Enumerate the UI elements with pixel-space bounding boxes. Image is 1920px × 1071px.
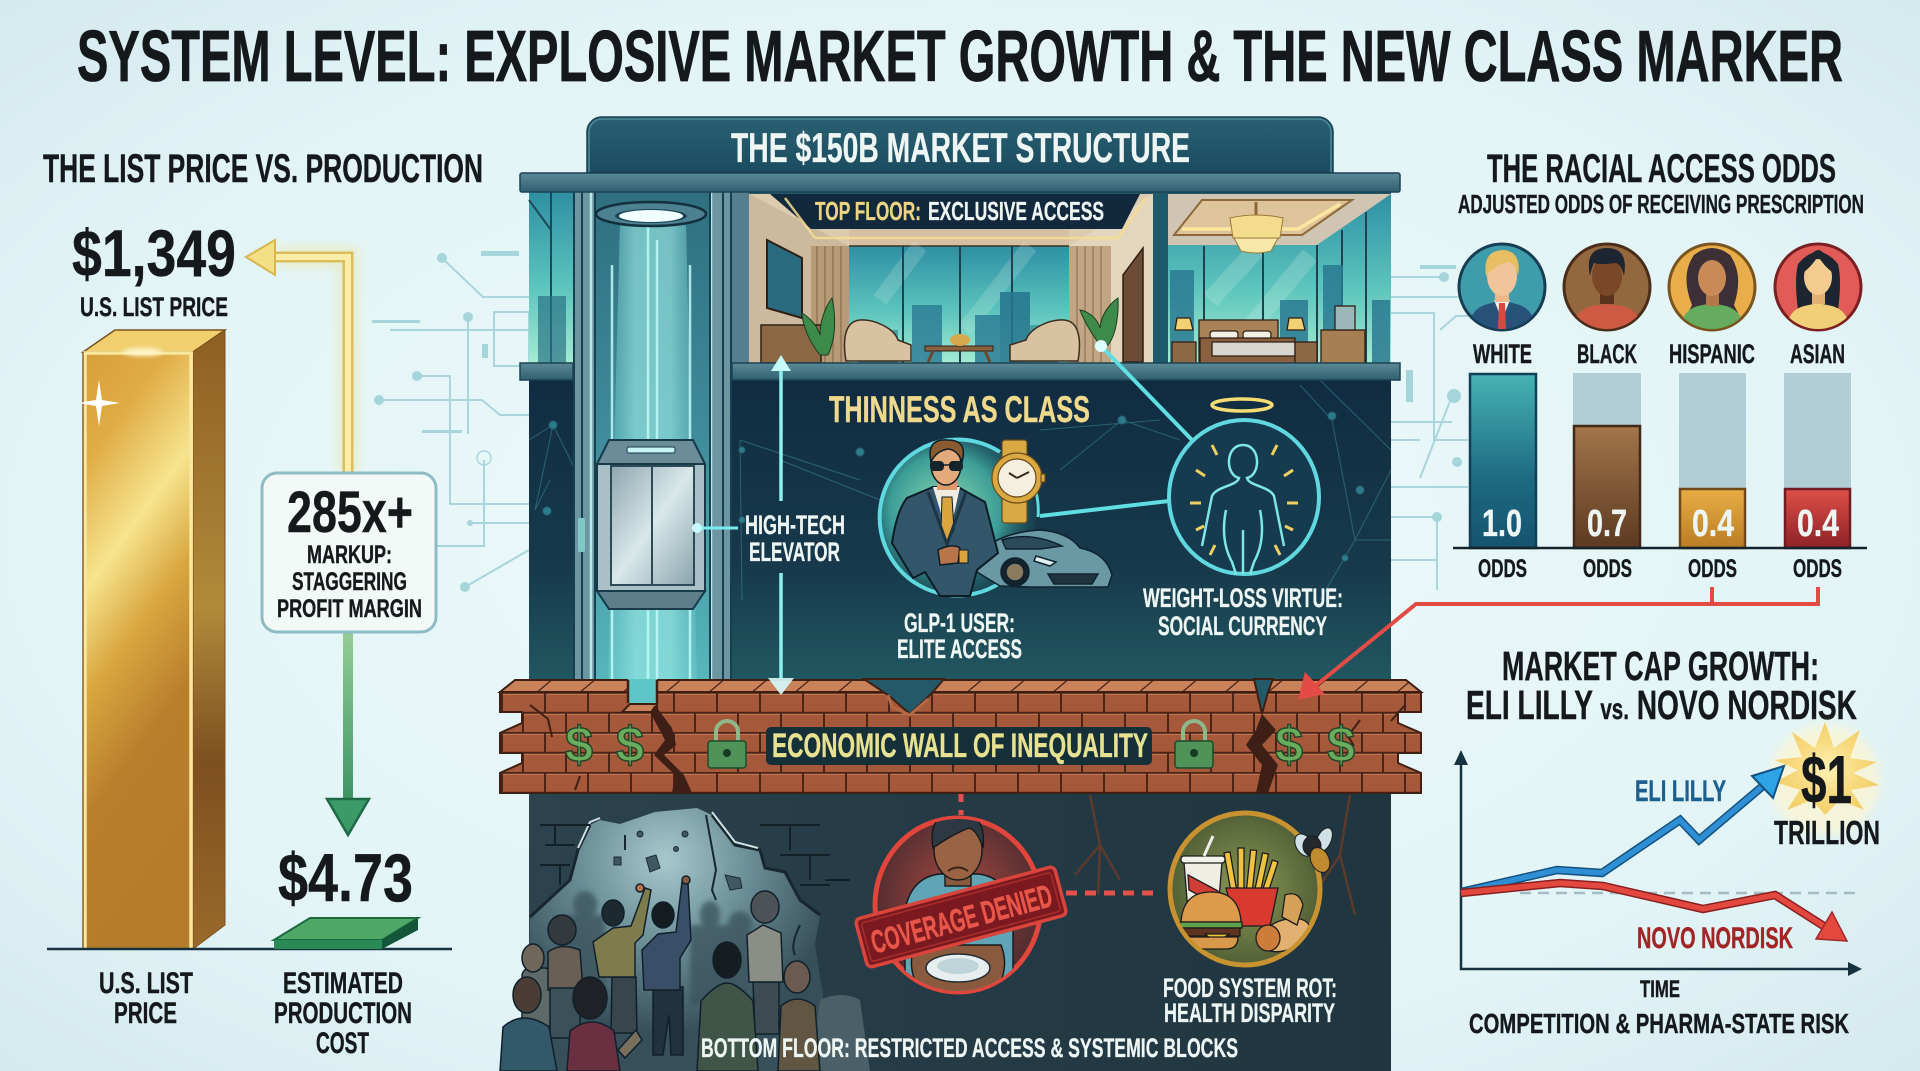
- label: production cost: COST: [316, 1027, 369, 1060]
- label: high-tech elevator: [692, 510, 845, 567]
- label: high-tech elevator: HIGH-TECH: [745, 510, 845, 540]
- group labels: [1473, 339, 1845, 369]
- person tan: [778, 961, 820, 1071]
- network lines in floor: [529, 380, 1391, 600]
- watch: [992, 440, 1045, 523]
- upper floor back: [529, 192, 1391, 364]
- connector lines: [1040, 340, 1192, 516]
- person brown back: [548, 915, 583, 1038]
- panel: market structure building: [500, 117, 1421, 1071]
- bar: hispanic: [1680, 489, 1745, 548]
- heading: thinness as class: THINNESS AS CLASS: [829, 389, 1090, 430]
- chart baseline: [47, 948, 452, 950]
- markup caption: MARKUP:: [307, 541, 392, 569]
- panel: racial access odds: [1453, 147, 1867, 583]
- label: production cost: PRODUCTION: [274, 997, 412, 1030]
- icon: locks: [708, 721, 1213, 768]
- icon: food system rot: [1170, 813, 1336, 965]
- bar: asian: 0.4: [1797, 503, 1839, 545]
- wall plate: [766, 727, 1152, 765]
- callout: one trillion: $1: [1801, 742, 1852, 818]
- person maroon: [567, 977, 642, 1071]
- icon: glp-1 user with watch and car: [880, 440, 1112, 596]
- elevator light: [596, 202, 706, 226]
- label: bottom floor: BOTTOM FLOOR: RESTRICTED ACCESS & SYSTEMIC BLOCKS: [701, 1033, 1238, 1063]
- group labels: WHITE: [1473, 339, 1532, 369]
- markup caption: STAGGERING: [292, 568, 407, 596]
- icon: dollar signs: $: [616, 717, 644, 773]
- banner title: THE $150B MARKET STRUCTURE: [731, 124, 1190, 171]
- panel: list price vs production: [43, 147, 483, 1060]
- elevator cab: [578, 440, 705, 609]
- axis label: time: TIME: [1640, 976, 1680, 1003]
- markup caption: PROFIT MARGIN: [277, 595, 422, 623]
- person blue: [642, 876, 691, 1055]
- label: weight-loss virtue: SOCIAL CURRENCY: [1158, 611, 1327, 641]
- icon: dollar signs: [565, 717, 1355, 773]
- odds labels: [1478, 555, 1842, 583]
- economic wall: [500, 679, 1421, 793]
- label: eli lilly: ELI LILLY: [1635, 775, 1726, 808]
- label: weight-loss virtue: [1143, 583, 1343, 641]
- label: novo nordisk: NOVO NORDISK: [1637, 922, 1793, 955]
- label: us list price: [99, 967, 193, 1030]
- arrow: vertical access lower head: [768, 678, 794, 695]
- icon: asian avatar: [1775, 244, 1861, 330]
- gold bar: [78, 330, 225, 949]
- mid floor bar: [520, 363, 1400, 380]
- odds labels: ODDS: [1793, 555, 1842, 583]
- chandelier: [1230, 202, 1283, 253]
- label: glp-1 user: ELITE ACCESS: [897, 634, 1022, 664]
- person olive: [593, 884, 651, 1033]
- starburst: [1770, 722, 1880, 835]
- person grey: [747, 891, 783, 1034]
- line: novo nordisk: [1461, 883, 1847, 941]
- heading: list price: THE LIST PRICE VS. PRODUCTION: [43, 147, 483, 191]
- value: list price: $1,349: [72, 216, 236, 290]
- room: bedroom top floor: [1168, 194, 1391, 364]
- wall cracks: [650, 705, 1278, 793]
- group labels: BLACK: [1577, 339, 1637, 369]
- callout: markup: [262, 473, 436, 632]
- left glass window: [529, 192, 573, 364]
- odds labels: ODDS: [1478, 555, 1527, 583]
- wall label: ECONOMIC WALL OF INEQUALITY: [772, 727, 1148, 765]
- car: [977, 530, 1112, 587]
- heading: market cap: [1466, 643, 1857, 728]
- icon: weight-loss virtue: [1169, 399, 1319, 574]
- arrow: green down to production cost: [327, 631, 369, 835]
- line: eli lilly: [1461, 766, 1784, 892]
- bar: white: 1.0: [1482, 503, 1522, 545]
- stamp: coverage denied: [855, 866, 1067, 968]
- icon: dollar signs: $: [1275, 717, 1303, 773]
- markup number: 285x+: [287, 480, 413, 545]
- callout: one trillion: [1774, 742, 1880, 851]
- icon: dollar signs: $: [565, 717, 593, 773]
- label: glp-1 user: [897, 608, 1022, 664]
- arrow: vertical access: [771, 355, 791, 685]
- bar: black: [1574, 426, 1640, 548]
- wall gaps: [622, 679, 1273, 715]
- bar: hispanic: 0.4: [1692, 503, 1734, 545]
- bar: black: 0.7: [1587, 503, 1627, 545]
- bar: asian: [1785, 489, 1850, 548]
- header banner: [587, 117, 1333, 172]
- person grey back: [522, 944, 552, 1028]
- top floor label: TOP FLOOR:: [815, 196, 921, 226]
- bar: white: [1470, 374, 1536, 548]
- background crowd: [565, 891, 752, 1005]
- label: us list price: PRICE: [114, 997, 177, 1030]
- odds labels: ODDS: [1688, 555, 1737, 583]
- fly: [1291, 825, 1336, 876]
- icon: dollar signs: $: [1327, 717, 1355, 773]
- odds labels: ODDS: [1583, 555, 1632, 583]
- bottom floor: [500, 772, 1391, 1071]
- arrow: yellow up to list price: [246, 240, 348, 472]
- circuit decoration left: [372, 251, 529, 592]
- top floor label: EXCLUSIVE ACCESS: [928, 196, 1104, 226]
- icon: hispanic avatar: [1669, 244, 1755, 330]
- label: weight-loss virtue: WEIGHT-LOSS VIRTUE:: [1143, 583, 1343, 613]
- man: [892, 440, 998, 596]
- label: production cost: [274, 967, 412, 1060]
- label: food system rot: [1163, 973, 1337, 1028]
- broken wall light: [529, 808, 870, 1071]
- group labels: HISPANIC: [1669, 339, 1755, 369]
- elevator shaft: [573, 192, 749, 682]
- arrow: red from odds to wall: [1298, 587, 1818, 700]
- stamp: coverage denied: COVERAGE DENIED: [867, 877, 1056, 960]
- bar chart: odds: [1453, 373, 1867, 548]
- icon: black avatar: [1564, 244, 1650, 330]
- label: food system rot: HEALTH DISPARITY: [1164, 998, 1335, 1028]
- crowd: [500, 876, 820, 1071]
- person teal: [500, 977, 557, 1071]
- circuit decoration right: [1391, 265, 1468, 590]
- value: production cost: $4.73: [278, 840, 413, 916]
- label: list price top: U.S. LIST PRICE: [80, 292, 228, 322]
- lower floor: [529, 380, 1391, 690]
- panel: market cap growth: [1454, 643, 1880, 1039]
- icon: coverage denied person: [875, 812, 1041, 1000]
- top floor label: [770, 194, 1146, 238]
- person green: [697, 942, 758, 1071]
- floor cracks: [1075, 795, 1355, 915]
- dashed red connectors: [961, 772, 1161, 893]
- group labels: ASIAN: [1790, 339, 1845, 369]
- label: production cost: ESTIMATED: [283, 967, 403, 1000]
- label: high-tech elevator: ELEVATOR: [749, 537, 840, 567]
- label: food system rot: FOOD SYSTEM ROT:: [1163, 973, 1337, 1003]
- roof bar: [520, 173, 1400, 192]
- green slab: [274, 918, 418, 949]
- markup caption: [277, 541, 422, 623]
- icon: white avatar: [1459, 244, 1545, 330]
- room: lounge top floor: [749, 194, 1153, 364]
- label: glp-1 user: GLP-1 USER:: [904, 608, 1015, 638]
- label: us list price: U.S. LIST: [99, 967, 193, 1000]
- line chart: [1454, 750, 1862, 976]
